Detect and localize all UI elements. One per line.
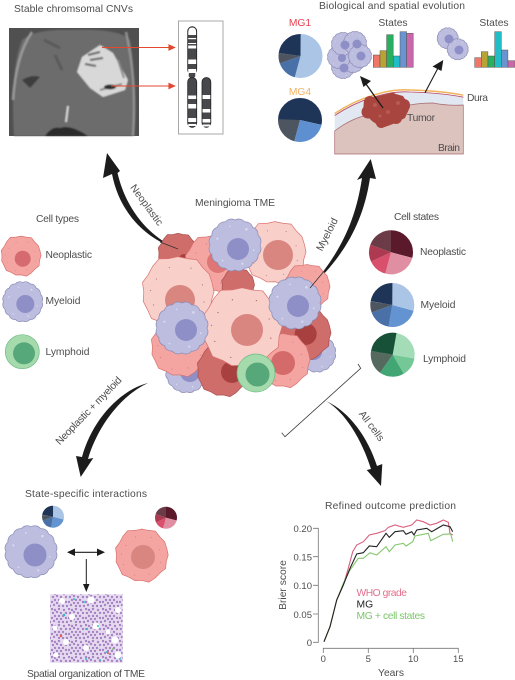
x tick labels: 0 — [321, 654, 326, 665]
label: MG4: MG4 — [289, 87, 311, 98]
label: MG1: MG1 — [289, 18, 311, 29]
y tick labels — [294, 524, 312, 649]
label: Tumor: Tumor — [407, 113, 436, 124]
legend: lymphoid cell: Lymphoid — [46, 347, 90, 358]
pie: MG1 — [286, 42, 315, 70]
line chart: Brier score — [278, 520, 464, 679]
heading: cell types: Cell types — [36, 214, 79, 225]
arrow: all cells — [326, 401, 382, 486]
y tick labels: 0.20 — [294, 524, 312, 535]
two myeloid cells — [437, 28, 468, 60]
arrow label: neoplastic + myeloid: Neoplastic + myeloid — [54, 375, 125, 447]
arrow label: all cells: All cells — [356, 409, 386, 444]
label: myeloid: Myeloid — [420, 300, 456, 311]
x tick labels: 10 — [408, 654, 419, 665]
legend: myeloid cell: Myeloid — [46, 296, 81, 307]
arrow label: myeloid: Myeloid — [315, 216, 341, 253]
arrow tails over cluster — [160, 242, 325, 288]
heading: meningioma TME: Meningioma TME — [195, 198, 275, 209]
series: MG + cell states — [324, 533, 453, 642]
x tick labels: 5 — [366, 654, 371, 665]
series: WHO grade — [324, 520, 453, 642]
arrow: neoplastic — [103, 153, 178, 249]
series: MG — [324, 525, 453, 642]
legend: neoplastic cell — [1, 236, 92, 276]
bar chart: states before: States — [378, 18, 408, 29]
chart legend: MG — [356, 600, 373, 610]
pie: MG4 — [287, 107, 313, 133]
legend: lymphoid cell — [5, 335, 90, 369]
pie: neoplastic states — [376, 238, 406, 267]
myeloid cell cluster — [328, 32, 371, 78]
tumor microenvironment cell cluster — [143, 219, 336, 397]
karyotype box with chromosomes — [178, 21, 223, 134]
pie: myeloid states — [378, 291, 406, 319]
bar chart: states after — [475, 18, 515, 67]
bar chart: states after: States — [479, 18, 509, 29]
arrow: dura to two cells — [425, 60, 443, 93]
heading: biological and spatial evolution: Biological and spatial evolution — [319, 1, 465, 12]
label: Brain: Brain — [438, 143, 460, 154]
pie: lymphoid states — [377, 339, 408, 370]
heading: state-specific interactions: State-specific interactions — [25, 489, 147, 500]
y tick labels: 0.05 — [294, 610, 312, 621]
neoplastic cell large — [116, 529, 168, 582]
legend: myeloid cell — [3, 282, 81, 322]
bracket: all cell groups — [282, 364, 361, 437]
x tick labels — [321, 654, 464, 679]
label: Dura: Dura — [467, 93, 488, 104]
y tick labels: 0.10 — [294, 581, 312, 592]
myeloid cell large — [5, 526, 57, 578]
arrow: tumor to many cells — [360, 76, 383, 108]
x tick labels: Years — [378, 668, 404, 679]
y tick labels: 0 — [307, 638, 312, 649]
arrow: neoplastic + myeloid — [76, 383, 148, 477]
arrow: myeloid — [310, 159, 376, 288]
heading: stable chromosomal CNVs: Stable chromsomal CNVs — [14, 4, 133, 15]
label: neoplastic: Neoplastic — [420, 247, 466, 258]
arrow label: neoplastic: Neoplastic — [127, 183, 165, 228]
y axis title: Brier score — [278, 560, 289, 610]
legend: neoplastic cell: Neoplastic — [46, 250, 92, 261]
heading: refined outcome prediction: Refined outcome prediction — [325, 501, 456, 512]
y axis — [313, 528, 458, 653]
pie: neoplastic small — [159, 510, 173, 525]
caption: spatial organization: Spatial organization of TME — [27, 669, 145, 680]
label: lymphoid: Lymphoid — [423, 354, 466, 365]
red arrows from tumor to chromosomes — [102, 45, 174, 88]
spatial organization map — [50, 594, 123, 663]
MRI scan image — [9, 28, 139, 136]
x tick labels: 15 — [453, 654, 464, 665]
brain and dura cross-section — [335, 90, 463, 154]
pie: myeloid small — [46, 510, 60, 524]
double-headed interaction arrow — [67, 548, 105, 556]
tumor — [362, 92, 410, 128]
y tick labels: 0.15 — [294, 552, 312, 564]
bar chart: states before — [373, 18, 413, 67]
chart legend: MG + cell states — [356, 611, 425, 622]
chart legend: WHO grade — [356, 588, 407, 599]
heading: cell states: Cell states — [394, 212, 439, 223]
arrow down to spatial map — [83, 559, 90, 592]
chart legend — [356, 588, 425, 622]
